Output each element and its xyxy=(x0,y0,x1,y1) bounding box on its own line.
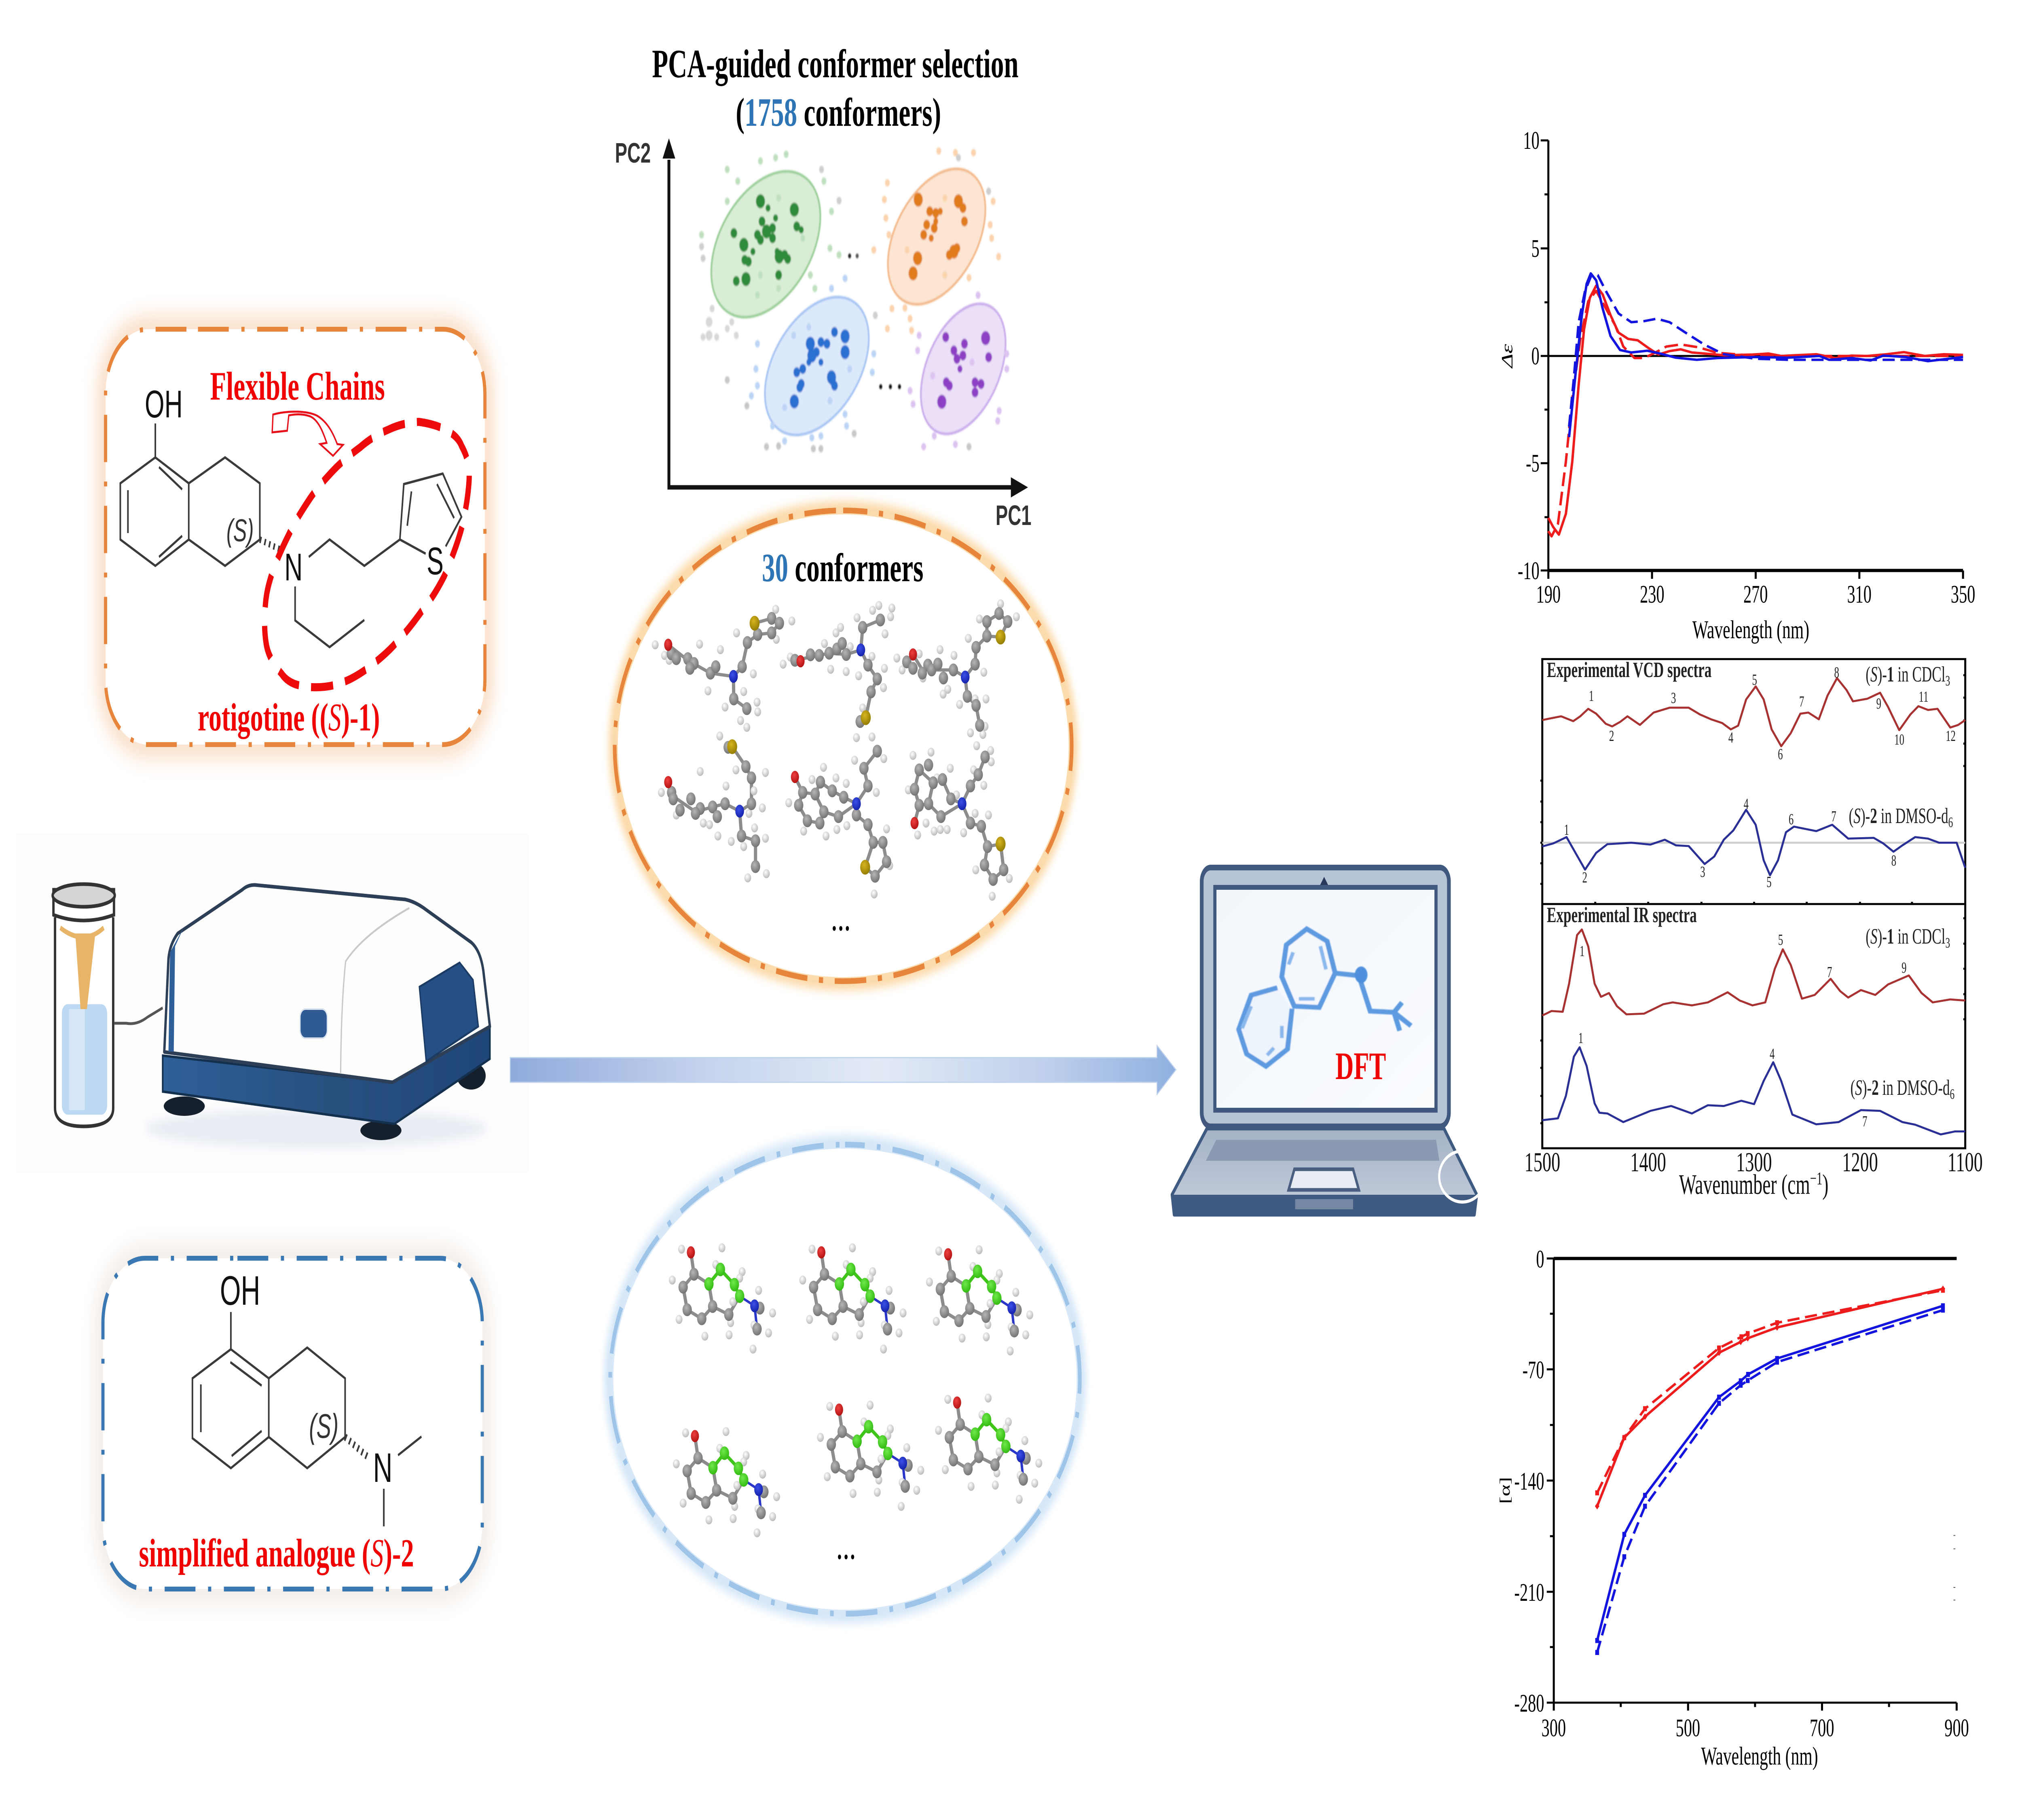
ORD tick labels: -140 xyxy=(1514,1467,1544,1495)
peak numbers: 4 xyxy=(1728,729,1733,746)
peak numbers: 8 xyxy=(1834,664,1839,681)
red dashed outline: flexible chain xyxy=(264,422,469,687)
chart: VCD and IR spectra xyxy=(1525,657,1983,1200)
peak numbers: 8 xyxy=(1891,852,1896,869)
laptop lid xyxy=(1202,868,1449,1126)
peak numbers: 5 xyxy=(1778,931,1783,948)
ORD series xyxy=(1597,1289,1943,1653)
molecule: rotigotine xyxy=(120,383,461,647)
peak numbers: 3 xyxy=(1700,863,1705,880)
series labels: 3 xyxy=(1946,935,1950,951)
title: PCA-guided conformer selection: (1758 conformers) xyxy=(736,90,941,135)
analogue conformer 1 xyxy=(669,1243,776,1354)
ORD tick labels xyxy=(1514,1245,1969,1742)
peak numbers: 2 xyxy=(1609,727,1614,744)
icon: sample tube xyxy=(53,884,115,1126)
ellipsis: ... xyxy=(831,895,851,940)
molecule: simplified analogue: N xyxy=(373,1445,392,1491)
molecule: rotigotine: S xyxy=(427,540,444,583)
axis labels xyxy=(615,137,1031,531)
ECD tick labels: -10 xyxy=(1518,557,1540,585)
peak numbers: 7 xyxy=(1862,1113,1868,1130)
analogue conformer 4 xyxy=(673,1427,780,1537)
axis labels: PC2 xyxy=(615,137,651,169)
ECD tick labels: 230 xyxy=(1640,580,1665,608)
chart: optical rotation dispersion xyxy=(1497,1245,1969,1770)
heading: flexible chains: Flexible Chains xyxy=(210,364,385,409)
ORD tick labels: 0 xyxy=(1536,1245,1544,1273)
spectra frame and curves xyxy=(1540,659,1965,1148)
ECD tick labels: 10 xyxy=(1523,127,1540,154)
molecule: simplified analogue: OH xyxy=(220,1268,260,1314)
icon: spectrometer with sample tube xyxy=(16,833,529,1173)
conformer 4 xyxy=(658,732,770,882)
ORD x-axis title: Wavelength (nm) xyxy=(1701,1742,1818,1770)
series labels: 6 xyxy=(1950,1086,1954,1102)
series labels: (S)-2 in DMSO-d xyxy=(1849,803,1948,828)
cluster: orange xyxy=(871,141,1002,334)
x-axis title: ) xyxy=(1822,1168,1828,1200)
panel: rotigotine structure box xyxy=(106,329,485,745)
molecule: simplified analogue: (S) xyxy=(309,1407,338,1445)
series labels: (S)-1 in CDCl xyxy=(1865,662,1946,686)
panel: simplified analogue structure box xyxy=(103,1258,482,1589)
ECD tick labels: 5 xyxy=(1531,235,1540,262)
peak numbers: 1 xyxy=(1564,821,1569,838)
peak numbers: 4 xyxy=(1770,1045,1775,1062)
ORD axes xyxy=(1547,1259,1956,1711)
axes with arrows xyxy=(669,160,1013,487)
x-axis title: Wavenumber (cm xyxy=(1679,1168,1810,1200)
conformer 5 xyxy=(785,732,893,899)
peak numbers: 9 xyxy=(1901,959,1907,976)
ECD y-axis title: Δε xyxy=(1498,344,1516,369)
series labels: (S)-1 in CDCl xyxy=(1865,924,1946,948)
peak numbers: 1 xyxy=(1578,1029,1583,1046)
icon: instrument body xyxy=(163,885,490,1140)
arrow: main process arrow xyxy=(510,1045,1176,1094)
label: simplified analogue: simplified analogue (S)-2 xyxy=(139,1531,414,1576)
panel: 30 conformers ellipse xyxy=(615,510,1072,981)
peak numbers: 1 xyxy=(1589,687,1594,704)
analogue conformer 2 xyxy=(799,1243,907,1354)
conformer 3 xyxy=(893,599,1020,739)
x tick labels: 1500 xyxy=(1525,1147,1560,1177)
x-axis title: −1 xyxy=(1810,1169,1822,1189)
molecule on screen xyxy=(1239,929,1411,1066)
ORD tick labels: -70 xyxy=(1523,1356,1544,1384)
white circle artifact xyxy=(1439,1151,1485,1202)
analogue conformer 6 xyxy=(935,1394,1042,1504)
peak numbers: 7 xyxy=(1827,963,1832,980)
ORD tick labels: -280 xyxy=(1514,1689,1544,1717)
peak numbers: 6 xyxy=(1789,811,1794,827)
ORD tick labels: 500 xyxy=(1676,1714,1700,1742)
peak numbers: 5 xyxy=(1752,671,1757,688)
peak numbers: 7 xyxy=(1831,808,1836,825)
peak numbers: 11 xyxy=(1919,688,1928,705)
molecules: six analogue conformers xyxy=(669,1243,1042,1537)
label: DFT: DFT xyxy=(1335,1045,1386,1088)
ECD tick labels: 270 xyxy=(1743,580,1768,608)
chart: ECD spectra xyxy=(1498,127,1975,644)
peak numbers: 1 xyxy=(1580,942,1584,959)
ECD tick labels: -5 xyxy=(1526,449,1540,477)
ORD tick labels: -210 xyxy=(1514,1579,1544,1606)
heading: 30 conformers: 30 conformers xyxy=(762,546,923,590)
molecule: rotigotine: (S) xyxy=(226,512,254,548)
molecule: rotigotine: N xyxy=(284,546,302,589)
cluster: purple xyxy=(905,279,1022,459)
series labels: (S)-2 in DMSO-d xyxy=(1851,1075,1950,1100)
y-axis arrowhead xyxy=(662,138,675,159)
peak numbers: 5 xyxy=(1766,873,1772,890)
cluster: green xyxy=(694,141,859,347)
ECD x-axis title: Wavelength (nm) xyxy=(1692,615,1809,644)
chart: PCA scatter plot xyxy=(615,137,1031,531)
peak numbers xyxy=(1564,664,1956,1130)
x tick labels: 1400 xyxy=(1630,1147,1666,1177)
arrow: curved red arrow xyxy=(272,412,343,456)
peak numbers: 3 xyxy=(1671,689,1676,706)
molecule: rotigotine: OH xyxy=(145,383,183,426)
x-axis arrowhead xyxy=(1011,477,1028,497)
molecules: six rotigotine conformers xyxy=(652,599,1020,901)
ECD curves xyxy=(1548,273,1963,536)
molecule: simplified analogue xyxy=(192,1268,421,1526)
cable xyxy=(114,1008,163,1024)
analogue conformer 5 xyxy=(817,1401,924,1511)
series labels xyxy=(1849,662,1954,1102)
ECD tick labels: 0 xyxy=(1531,342,1540,370)
title: PCA-guided conformer selection: PCA-guided conformer selection xyxy=(652,42,1019,87)
title: PCA-guided conformer selection xyxy=(652,42,1019,135)
VCD heading: Experimental VCD spectra xyxy=(1547,657,1712,682)
analogue conformer 3 xyxy=(926,1245,1033,1356)
ECD tick labels: 350 xyxy=(1951,580,1975,608)
x tick labels: 1100 xyxy=(1948,1147,1983,1177)
ECD tick labels: 310 xyxy=(1847,580,1872,608)
conformer 6 xyxy=(905,741,1013,901)
ECD axes xyxy=(1541,140,1963,579)
ORD tick labels: 300 xyxy=(1542,1714,1566,1742)
peak numbers: 2 xyxy=(1582,869,1587,886)
ECD tick labels: 190 xyxy=(1536,580,1561,608)
icon: laptop with DFT screen xyxy=(1172,868,1485,1215)
peak numbers: 6 xyxy=(1778,745,1783,762)
peak numbers: 12 xyxy=(1946,727,1956,744)
x tick labels xyxy=(1525,1147,1983,1177)
peak numbers: 10 xyxy=(1894,731,1904,748)
IR heading: Experimental IR spectra xyxy=(1547,902,1697,927)
ECD tick labels xyxy=(1518,127,1975,608)
conformer 1 xyxy=(652,605,795,732)
series labels: 6 xyxy=(1948,814,1953,830)
peak numbers: 7 xyxy=(1799,693,1804,710)
peak numbers: 4 xyxy=(1744,795,1749,812)
ORD markers xyxy=(1595,1286,1945,1509)
peak numbers: 9 xyxy=(1876,695,1881,712)
cluster: blue xyxy=(701,269,901,463)
conformer 2 xyxy=(780,601,895,742)
axis labels: PC1 xyxy=(996,499,1031,531)
ellipsis: ... xyxy=(836,1523,856,1568)
x tick labels: 1300 xyxy=(1736,1147,1772,1177)
laptop base xyxy=(1172,1128,1477,1215)
ORD tick labels: 700 xyxy=(1810,1714,1834,1742)
label: rotigotine: rotigotine ((S)-1) xyxy=(198,695,380,739)
x tick labels: 1200 xyxy=(1842,1147,1878,1177)
series labels: 3 xyxy=(1946,673,1950,689)
ORD tick labels: 900 xyxy=(1944,1714,1969,1742)
ORD y-axis title: [α] xyxy=(1497,1477,1513,1504)
panel: analogue conformers ellipse xyxy=(610,1145,1080,1614)
